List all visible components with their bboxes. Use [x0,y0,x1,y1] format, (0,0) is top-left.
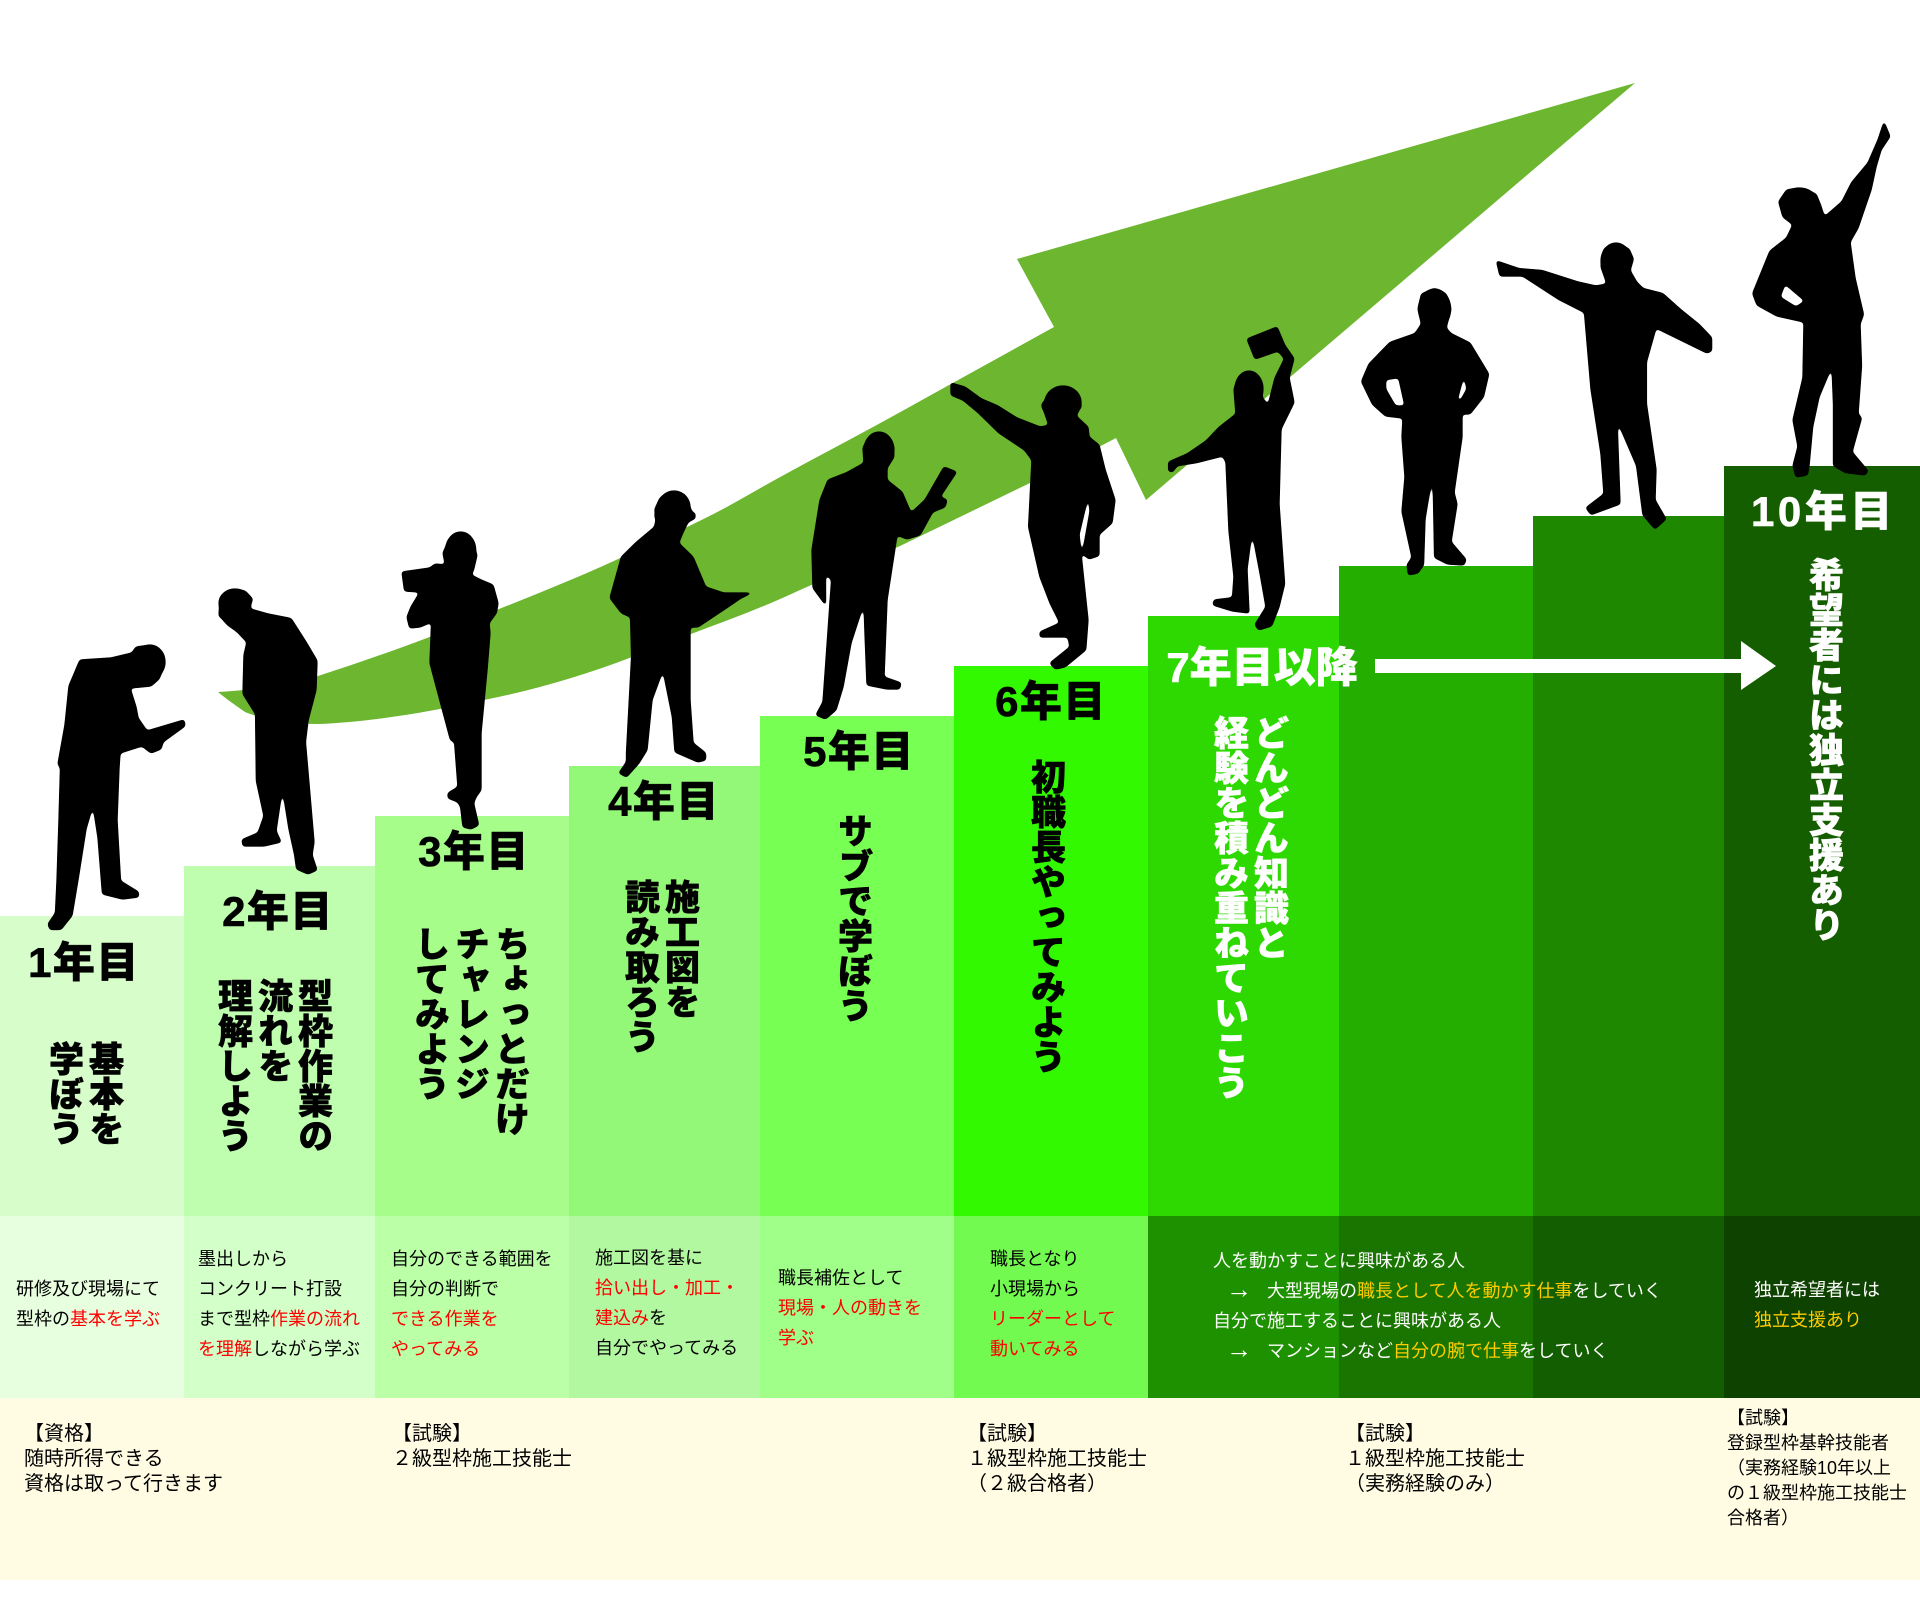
text: grade 1 exam by experience: （実務経験のみ） [1345,1473,1505,1495]
heading: 7年目以降: 7年目以降 [1166,644,1358,691]
panel: year 9 step [1533,516,1724,1216]
vertical text: 基本を学ぼう: 学ぼう [44,1041,83,1146]
text: grade 1 exam [967,1423,1147,1495]
panel: year 3 step [375,816,569,1216]
vertical text: 施工図を読み取ろう: 施工図を [660,879,699,1019]
text: grade 2 exam: ２級型枠施工技能士 [392,1448,572,1470]
text: year 10 description: 独立支援あり [1754,1310,1862,1330]
text: year 5 description [778,1268,922,1348]
text: year 2 description: まで型枠作業の流れ [198,1309,360,1329]
text: grade 2 exam [392,1423,572,1470]
text: grade 1 exam: 【試験】 [967,1423,1047,1445]
panel: description year 7 [1148,1216,1339,1398]
text: year 7 onward description: 人を動かすことに興味がある人 [1213,1251,1465,1271]
text: year 1 description: 研修及び現場にて [16,1279,160,1299]
vertical text: 初職長やってみよう: 初職長やってみよう [1026,759,1065,1074]
text: year 5 description: 現場・人の動きを [778,1298,922,1318]
text: qualification note [24,1423,223,1495]
heading: 2年目: 2年目 [222,888,334,935]
text: year 4 description: 拾い出し・加工・ [595,1278,739,1298]
text: registered core technician exam [1727,1408,1907,1528]
vertical text: 施工図を読み取ろう [620,879,700,1054]
text: qualification note: 【資格】 [24,1423,104,1445]
text: year 3 description: やってみる [391,1339,480,1359]
text: year 7 onward description [1213,1251,1662,1364]
heading: 4年目: 4年目 [608,778,720,825]
panel: description year 8 [1339,1216,1533,1398]
text: qualification note: 随時所得できる [24,1448,164,1470]
text: year 2 description: を理解しながら学ぶ [198,1339,360,1359]
panel: year 1 step [0,916,184,1216]
text: year 2 description: コンクリート打設 [198,1279,342,1299]
panel: year 8 step [1339,566,1533,1216]
heading: 6年目: 6年目 [995,678,1107,725]
text: grade 1 exam by experience: １級型枠施工技能士 [1345,1448,1525,1470]
panel: description year 1 [0,1216,184,1398]
panel: description year 6 [954,1216,1148,1398]
vertical text: どんどん知識と経験を積み重ねていこう: どんどん知識と [1249,715,1288,960]
text: year 10 description [1754,1280,1880,1330]
heading: 5年目: 5年目 [803,728,915,775]
text: grade 1 exam: （２級合格者） [967,1473,1107,1495]
heading: 1年目: 1年目 [28,939,140,986]
icon: worker 10 arm raised [1753,122,1890,477]
text: registered core technician exam: （実務経験10年以上 [1727,1458,1891,1478]
text: year 1 description [16,1279,160,1329]
text: year 6 description: 小現場から [990,1279,1080,1299]
text: qualification note: 資格は取って行きます [24,1473,223,1495]
text: year 3 description: 自分の判断で [391,1279,499,1299]
vertical text: 型枠作業の流れを理解しよう: 理解しよう [213,978,252,1153]
text: year 4 description: 自分でやってみる [595,1338,738,1358]
text: year 1 description: 型枠の基本を学ぶ [16,1309,160,1329]
icon: worker 4 holding plans [610,491,752,777]
panel: description year 9 [1533,1216,1724,1398]
text: year 5 description: 学ぶ [778,1328,814,1348]
text: grade 1 exam by experience [1345,1423,1525,1495]
panel: year 7 onward step [1148,616,1339,1216]
text: registered core technician exam: 【試験】 [1727,1408,1799,1428]
vertical text: 型枠作業の流れを理解しよう: 流れを [253,978,292,1083]
icon: worker 8 hands on hips [1362,288,1489,575]
vertical text: ちょっとだけチャレンジしてみよう [410,926,530,1136]
text: registered core technician exam: の１級型枠施工技能士 [1727,1483,1907,1503]
text: year 10 description: 独立希望者には [1754,1280,1880,1300]
vertical text: 基本を学ぼう [44,1041,124,1146]
text: year 6 description [990,1249,1115,1359]
vertical text: ちょっとだけチャレンジしてみよう: してみよう [410,926,449,1101]
vertical text: ちょっとだけチャレンジしてみよう: ちょっとだけ [490,926,529,1136]
heading: 3年目: 3年目 [418,828,530,875]
heading: 10年目: 10年目 [1751,488,1896,535]
text: year 7 onward description: → [1226,1274,1252,1304]
text: grade 2 exam: 【試験】 [392,1423,472,1445]
icon: worker 1 reading [48,645,185,930]
panel: description year 10 [1724,1216,1920,1398]
text: registered core technician exam: 登録型枠基幹技能者 [1727,1433,1889,1453]
icon: worker 5 holding clipboard [812,432,957,719]
text: grade 1 exam: １級型枠施工技能士 [967,1448,1147,1470]
vertical text: 希望者には独立支援あり: 希望者には独立支援あり [1804,557,1843,942]
text: year 6 description: 動いてみる [990,1339,1079,1359]
vertical text: 型枠作業の流れを理解しよう [213,978,333,1153]
text: year 6 description: リーダーとして [990,1309,1115,1329]
panel: year 4 step [569,766,760,1216]
panel: description year 4 [569,1216,760,1398]
panel: year 10 step [1724,466,1920,1216]
text: year 7 onward description: マンションなど自分の腕で仕事をしていく [1267,1341,1608,1361]
text: grade 1 exam by experience: 【試験】 [1345,1423,1425,1445]
panel: year 5 step [760,716,954,1216]
vertical text: 型枠作業の流れを理解しよう: 型枠作業の [293,978,332,1153]
text: year 2 description [198,1249,360,1359]
text: year 6 description: 職長となり [990,1249,1079,1269]
panel: description year 3 [375,1216,569,1398]
text: year 7 onward description: 大型現場の職長として人を動かす仕事をしていく [1267,1281,1662,1301]
vertical text: サブで学ぼう: サブで学ぼう [833,813,872,1023]
icon: worker 7 raising book [1169,327,1294,630]
text: year 5 description: 職長補佐として [778,1268,903,1288]
text: year 3 description: できる作業を [391,1309,499,1329]
text: year 4 description [595,1248,739,1358]
text: year 2 description: 墨出しから [198,1249,288,1269]
icon: worker 9 arms spread [1496,243,1712,529]
text: year 3 description [391,1249,553,1359]
icon: worker 6 pointing [951,383,1115,669]
text: year 7 onward description: 自分で施工することに興味がある人 [1213,1311,1501,1331]
text: registered core technician exam: 合格者） [1727,1508,1799,1528]
panel: description year 5 [760,1216,954,1398]
panel: qualifications and exams [0,1398,1920,1580]
text: year 4 description: 施工図を基に [595,1248,703,1268]
icon: worker 2 looking down [219,589,317,874]
vertical text: ちょっとだけチャレンジしてみよう: チャレンジ [450,926,489,1101]
vertical text: どんどん知識と経験を積み重ねていこう [1209,715,1289,1100]
vertical text: 基本を学ぼう: 基本を [84,1041,123,1146]
text: year 4 description: 建込みを [595,1308,667,1328]
text: year 7 onward description: → [1226,1334,1252,1364]
vertical text: どんどん知識と経験を積み重ねていこう: 経験を積み重ねていこう [1209,715,1248,1100]
panel: year 6 step [954,666,1148,1216]
panel: year 2 step [184,866,375,1216]
text: year 3 description: 自分のできる範囲を [391,1249,553,1269]
icon: worker 3 with camera [402,532,498,829]
vertical text: 施工図を読み取ろう: 読み取ろう [620,879,659,1054]
panel: description year 2 [184,1216,375,1398]
